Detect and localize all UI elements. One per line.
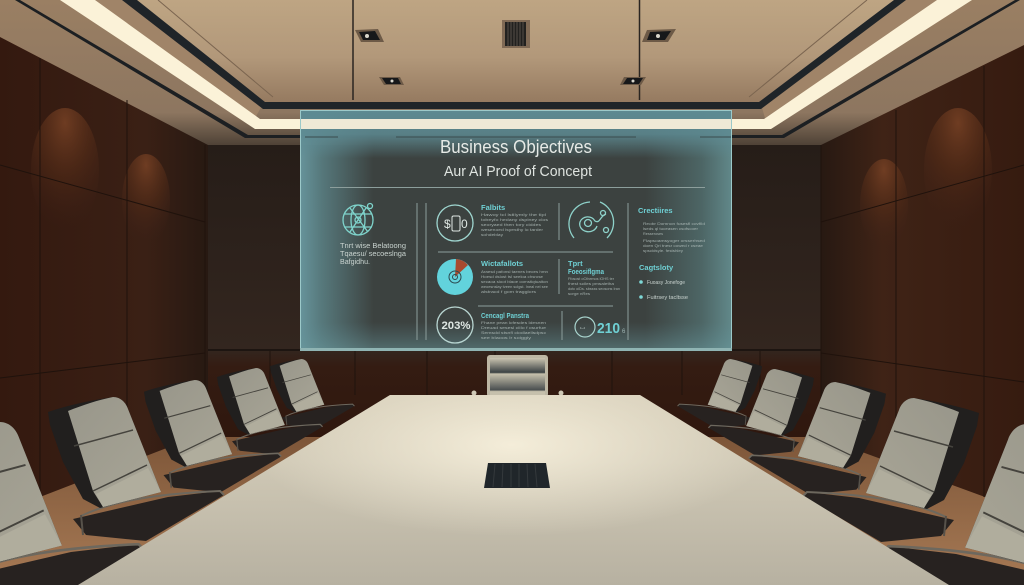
section: Wictafallots: Wictafallots: [481, 259, 523, 268]
left text block: Tnrt wise Belatoong: [340, 243, 406, 250]
left wood wall: [0, 37, 208, 505]
right wood wall: [821, 45, 1024, 505]
suspension rods: [353, 0, 640, 100]
thin ceiling grooves: [158, 0, 867, 97]
stat: 210: [575, 317, 626, 337]
section: Cagtsloty: Fuitrsey tacltsse: [647, 295, 688, 301]
stat: 210: 6: [622, 329, 626, 335]
section: Cencagl Panstra: [481, 311, 546, 340]
section: Crectiires: Crectiires: [638, 206, 673, 215]
downlight: [620, 77, 646, 85]
icon: spiral ring: [569, 202, 614, 238]
ceiling vent: [502, 20, 530, 48]
lower dark line: [15, 0, 1020, 138]
back wall: [205, 145, 825, 437]
chair L5: [270, 359, 354, 428]
chair R4: [708, 369, 814, 455]
section: Cagtsloty: [639, 263, 688, 301]
section: Falbits: [481, 203, 548, 237]
ceiling fixtures: [353, 0, 676, 100]
icon: dollar circle: 0: [461, 217, 468, 231]
ceiling inner tray: [122, 0, 906, 104]
floor: [0, 425, 1024, 585]
icon: dollar circle: $: [444, 217, 451, 231]
chair L2: [48, 397, 224, 541]
light strip: [60, 0, 972, 129]
section: Crectiires: lseds ql tuceasen csofscoer: [643, 226, 699, 231]
section: Falbits: Hawoy tcl lstilymly the tipl: [481, 212, 546, 217]
downlight: [379, 77, 404, 85]
section: Crectiires: doen Qri tnesr cowed r cseae: [643, 243, 703, 248]
section: Cagtsloty: Fuoasy Jonefoge: [647, 280, 685, 286]
section: Cencagl Panstra: Fhane pean lcfesdes ldesnen: [481, 320, 546, 325]
chair L3: [144, 380, 281, 492]
chair L4: [217, 368, 323, 454]
icon: dollar circle: [437, 205, 473, 241]
left text block: Bafgidhu.: [340, 259, 370, 266]
icon: network globe: [343, 204, 373, 235]
section: Wictafallots: Araesd pafonsl taenes beoes hmn: [481, 269, 548, 274]
left text block: [340, 243, 406, 266]
stat: 210: •–•: [580, 325, 586, 330]
section: Cagtsloty: Cagtsloty: [639, 263, 674, 272]
section: Cencagl Panstra: Dreuad sesesl ciilo f csurfue: [481, 325, 546, 330]
dark cove band: [122, 0, 906, 109]
section: Tprt Foeosiflgma: Ffosost oCthemos lOHS ter: [568, 276, 615, 281]
left text block: Tqaesu/ secoeslnga: [340, 251, 406, 258]
section: Falbits: wesenoed lsyesthy lo tarder: [481, 227, 544, 232]
section: Cencagl Panstra: see blaoos lr soiggiy: [481, 335, 531, 340]
section: Tprt Foeosiflgma: thest sciles pmsaletha: [568, 281, 615, 286]
right chairs: [678, 359, 1024, 585]
head chair: [472, 355, 564, 397]
section: Wictafallots: secaoa sloot blaoe comstiqtuaiton: [481, 279, 548, 284]
section: Tprt Foeosiflgma: Tprt: [568, 259, 583, 268]
section: Tprt Foeosiflgma: Foeosiflgma: [568, 267, 605, 276]
section: Falbits: seoryaed then tory ciddes: [481, 222, 541, 227]
section: Crectiires: [638, 206, 705, 253]
stat circle: 203%: 203%: [442, 320, 471, 332]
section: Falbits: tobeyfo hedany dspiney clos: [481, 217, 548, 222]
table centre pad: [484, 463, 550, 488]
section: Cencagl Panstra: Semsdd stsnfl ciodlaellsdpsc: [481, 330, 546, 335]
section: Wictafallots: Hoesd dslost tsl seeloa chsrose: [481, 274, 543, 279]
section: Tprt Foeosiflgma: [568, 259, 620, 296]
panel subtitle: Aur AI Proof of Concept: [444, 163, 593, 180]
section: Wictafallots: weoesnslay tveen sclgst. Ineal nel see: [481, 284, 548, 289]
ceiling: [0, 0, 1024, 150]
projected glass panel: [300, 110, 732, 351]
section: Tprt Foeosiflgma: sorge nRes: [568, 291, 590, 296]
section: Crectiires: spscidsyle. festshley: [643, 248, 683, 253]
panel title: Business Objectives: [440, 137, 592, 157]
section: Tprt Foeosiflgma: dotc oiDs. sbssss seosons Iran: [568, 286, 620, 291]
downlight: [642, 29, 676, 42]
conference table: [78, 395, 949, 585]
stat: 210: 210: [597, 321, 620, 337]
panel dividers: [330, 188, 705, 340]
chair R1: [883, 424, 1024, 585]
downlight: [355, 29, 384, 42]
section: Crectiires: Resseroses: [643, 231, 663, 236]
section: Falbits: sohdeblay: [481, 232, 503, 237]
section: Wictafallots: alstracd f gom tragglors: [481, 289, 536, 294]
chair R5: [678, 359, 762, 428]
stat circle: 203%: [437, 307, 473, 343]
section: Crectiires: Reobr Domnon fusesfl covfild: [643, 221, 705, 226]
section: Wictafallots: [481, 259, 548, 294]
section: Crectiires: Flapsoamsyoger orsserhsed: [643, 238, 705, 243]
section: Falbits: Falbits: [481, 203, 505, 212]
pie chart: [437, 259, 473, 295]
section: Cencagl Panstra: Cencagl Panstra: [481, 311, 530, 320]
left chairs: [0, 359, 354, 585]
chair R3: [749, 382, 886, 494]
chair R2: [803, 398, 979, 542]
chair L1: [0, 422, 144, 585]
